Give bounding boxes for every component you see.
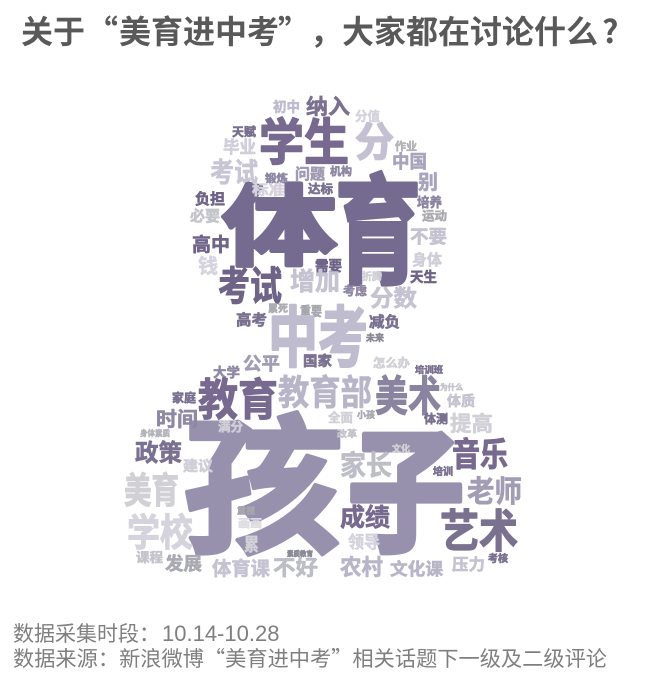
word: 问题: 问题 (295, 163, 325, 184)
word: 作业: 作业 (395, 138, 417, 154)
word: 家庭: 家庭 (172, 389, 196, 406)
word: 增加: 增加 (290, 262, 340, 298)
word: 小孩: 小孩 (357, 408, 375, 421)
word: 运动: 运动 (422, 207, 447, 224)
word: 折腾: 折腾 (362, 268, 382, 283)
word: 分值: 分值 (355, 106, 380, 125)
word: 文化: 文化 (392, 442, 410, 455)
word: 毕业: 毕业 (223, 133, 256, 158)
word: 需要: 需要 (315, 256, 342, 276)
word: 领导: 领导 (348, 528, 380, 553)
word: 考试 (upper): 考试 (210, 151, 258, 190)
title: ， (310, 7, 342, 53)
title: ” (278, 7, 310, 53)
word: 体育课: 体育课 (212, 554, 270, 581)
word: 课程: 课程 (136, 547, 163, 566)
word: 累死: 累死 (268, 300, 288, 315)
word: 教育部: 教育部 (278, 365, 372, 416)
title: 大家都在讨论什么 (342, 7, 598, 53)
word: 农村: 农村 (340, 550, 383, 582)
word: 体质: 体质 (447, 391, 475, 411)
word: 天赋: 天赋 (232, 123, 256, 140)
word: 考核: 考核 (488, 550, 508, 565)
word: 公平: 公平 (243, 350, 280, 376)
word: 时间: 时间 (156, 403, 198, 432)
title: 关于 (21, 7, 85, 53)
word: 美育: 美育 (124, 462, 179, 514)
word: 子: 子 (347, 384, 465, 580)
word: 改革: 改革 (337, 427, 357, 440)
word: 画画: 画画 (238, 515, 262, 531)
word: 标准: 标准 (252, 180, 285, 200)
word: 分: 分 (355, 110, 394, 168)
title: 美育进中考 (119, 7, 279, 53)
data source: 数据来源：新浪微博“美育进中考”相关话题下一级及二级评论 (13, 643, 607, 673)
word: 教育: 教育 (198, 364, 278, 428)
word: 初中: 初中 (273, 97, 300, 117)
word: 为什么: 为什么 (440, 382, 463, 393)
title: “ (86, 7, 118, 53)
word: 大学: 大学 (213, 362, 240, 381)
word: 分数: 分数 (370, 279, 417, 313)
word: 不要: 不要 (410, 223, 447, 249)
word: 音乐: 音乐 (452, 428, 508, 476)
word: 锻炼: 锻炼 (265, 170, 288, 186)
word: 素质教育: 素质教育 (287, 549, 313, 559)
word: 中考: 中考 (268, 285, 368, 381)
word: 纳入: 纳入 (306, 91, 350, 121)
word: 全面: 全面 (328, 407, 353, 426)
word: 负担: 负担 (195, 188, 225, 209)
word: 体: 体 (222, 157, 337, 284)
word: 身体: 身体 (412, 249, 442, 270)
word: 学生: 学生 (259, 103, 349, 175)
word: 成绩: 成绩 (340, 498, 390, 534)
word: 未来: 未来 (366, 331, 384, 344)
word: 建议: 建议 (183, 456, 213, 476)
word: 家长: 家长 (340, 444, 392, 484)
word: 培养: 培养 (417, 192, 442, 211)
word: 艺术: 艺术 (440, 495, 518, 560)
word: 文化课: 文化课 (390, 555, 443, 580)
word: 培训班: 培训班 (415, 363, 443, 376)
word cloud: person silhouette (124, 91, 522, 585)
word: 不好: 不好 (273, 552, 318, 582)
word: 钱: 钱 (198, 250, 218, 279)
word: 满分: 满分 (218, 418, 243, 435)
word: 高考: 高考 (236, 309, 267, 330)
word: 身体素质: 身体素质 (140, 428, 170, 439)
word: 怎么办: 怎么办 (373, 354, 410, 371)
word cloud: body (124, 285, 522, 585)
word: 发展: 发展 (165, 550, 202, 576)
word: 重要: 重要 (300, 301, 322, 320)
word: 高中: 高中 (192, 230, 230, 257)
word: 提高: 提高 (450, 408, 493, 438)
word: 育: 育 (335, 137, 421, 308)
word: 培训: 培训 (433, 463, 453, 478)
word: 别: 别 (418, 166, 438, 195)
word: 体测: 体测 (424, 410, 448, 427)
word: 美术: 美术 (375, 363, 441, 424)
word: 中国: 中国 (392, 148, 427, 174)
word: 累: 累 (244, 531, 259, 557)
word: 学校: 学校 (127, 502, 193, 557)
word: 政策: 政策 (135, 433, 182, 468)
word: 减负: 减负 (369, 311, 400, 332)
word: 考虑: 考虑 (343, 282, 367, 299)
word: 孩: 孩 (183, 368, 343, 585)
word: 国家: 国家 (303, 351, 332, 371)
word: 达标: 达标 (308, 180, 333, 197)
word cloud: head (190, 91, 447, 344)
data collection period: 10.14-10.28 (162, 621, 279, 646)
title: ? (602, 7, 618, 53)
word: 天生: 天生 (410, 267, 437, 287)
footer: data notes (13, 618, 607, 673)
word: 压力: 压力 (452, 551, 485, 575)
word: 重视: 重视 (237, 504, 255, 517)
word: 机构: 机构 (330, 163, 352, 179)
data collection period: 数据采集时段： (13, 618, 160, 648)
word: 必要: 必要 (190, 205, 220, 226)
word: 考试 (lower): 考试 (218, 254, 282, 312)
word: 老师: 老师 (467, 467, 522, 511)
